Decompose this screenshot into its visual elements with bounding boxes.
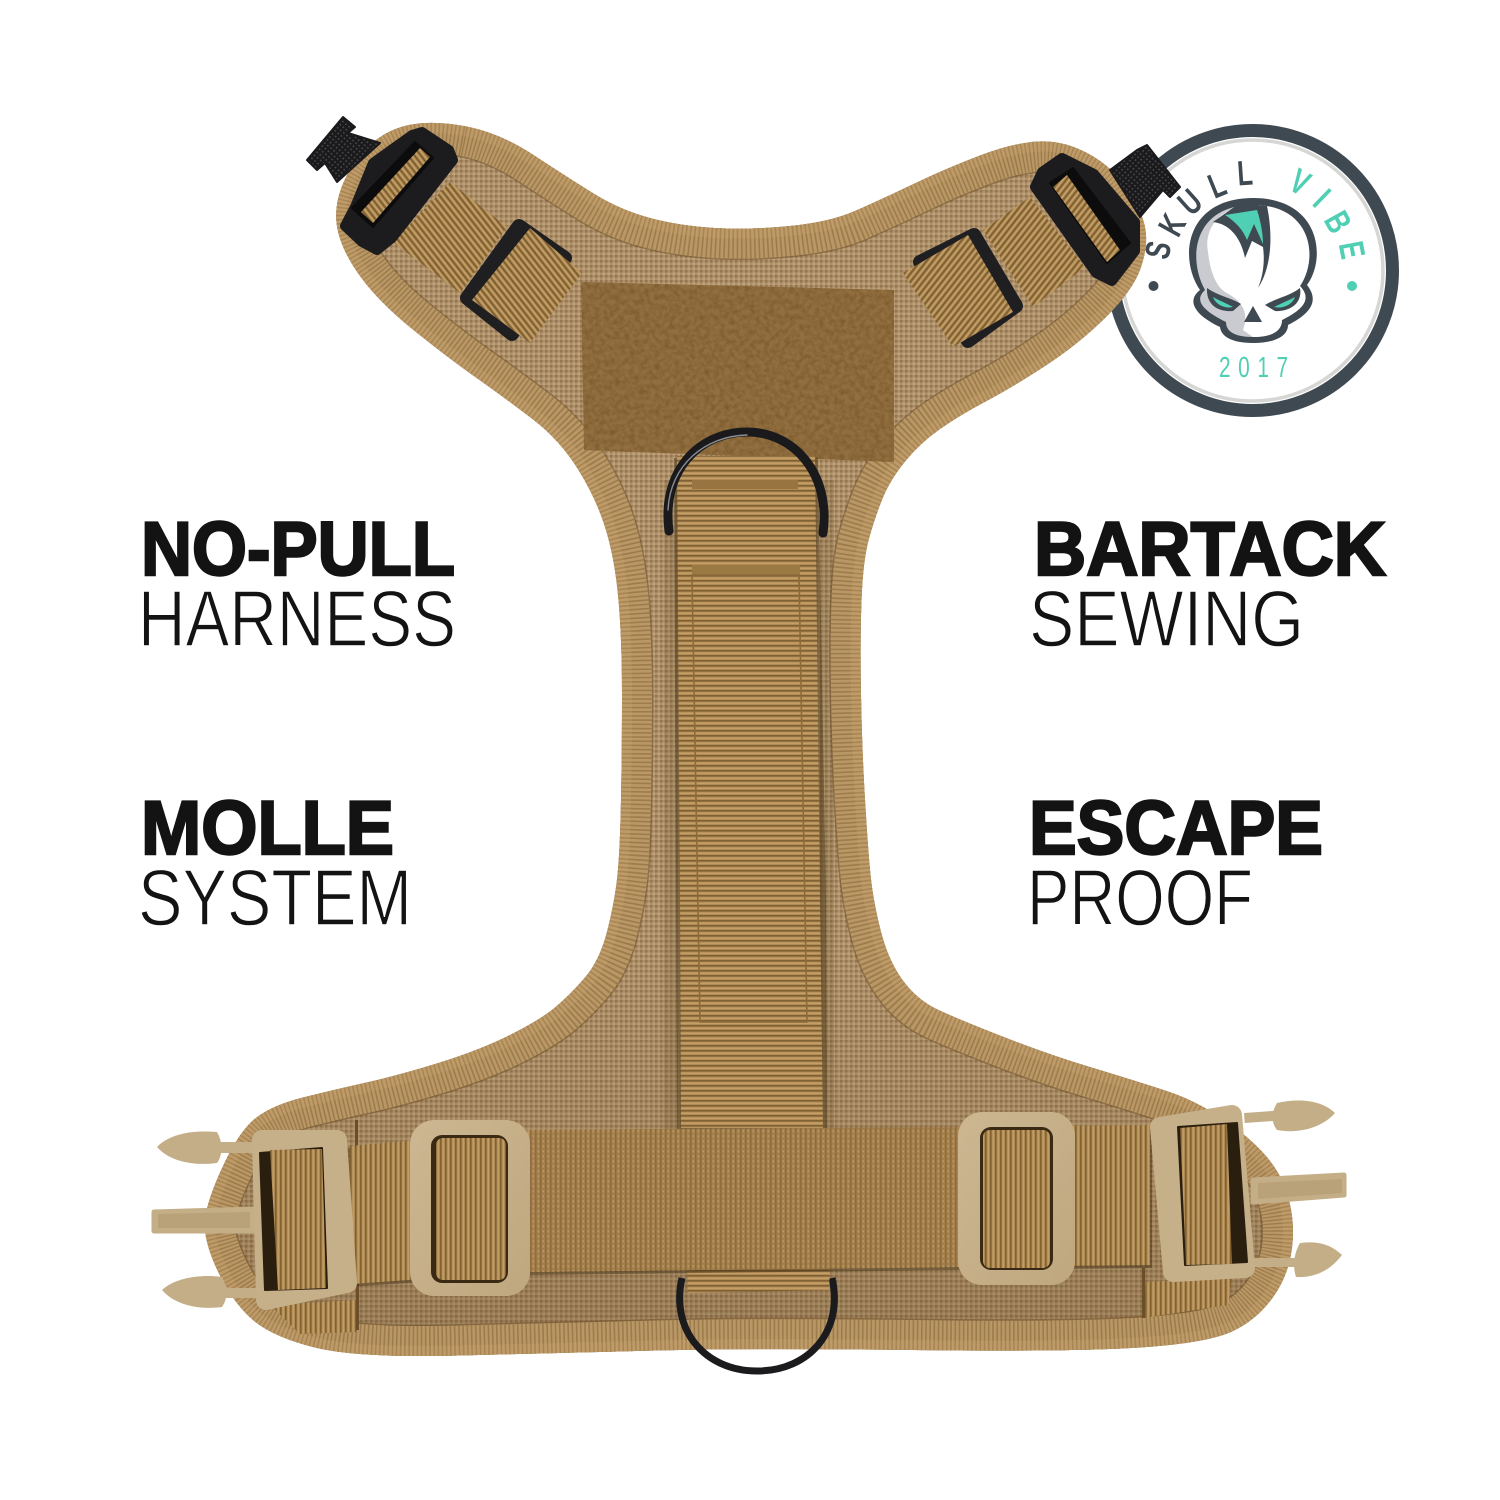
top-left webbing [393, 182, 507, 293]
center right prong [1253, 1175, 1344, 1202]
logo text: SKULL: U [1171, 182, 1210, 223]
logo dot right [1347, 281, 1357, 291]
top-right slider [903, 235, 1016, 347]
feature label: MOLLE SYSTEM: MOLLE [141, 786, 394, 871]
logo text: VIBE [1283, 161, 1372, 262]
velcro patch [581, 282, 894, 462]
harness [154, 117, 1344, 1371]
bottom D-ring tab and ring [680, 1266, 834, 1371]
bar tack stitching lower [692, 565, 800, 575]
horizontal belly strap [346, 1125, 1152, 1287]
feature label: MOLLE SYSTEM [138, 786, 412, 942]
lower right prong [1253, 1242, 1342, 1277]
logo text: SKULL: L [1236, 154, 1254, 194]
feature label: BARTACK SEWING: SEWING [1029, 574, 1304, 663]
top-left slider [467, 226, 582, 343]
mesh shading [200, 480, 1300, 1360]
logo dot left [1148, 281, 1158, 291]
center left prong [154, 1209, 255, 1231]
logo badge: Skull Vibe 2017 [1112, 130, 1392, 410]
panel: harness padded mesh body [205, 123, 1293, 1356]
feature label: BARTACK SEWING: BARTACK [1034, 507, 1386, 592]
logo text: SKULL: K [1151, 208, 1194, 243]
top-right webbing [983, 197, 1085, 307]
logo text: VIBE: V [1283, 161, 1317, 204]
logo text: VIBE: E [1331, 238, 1372, 262]
feature label: ESCAPE PROOF: ESCAPE [1029, 786, 1323, 871]
stitched box on strap [692, 575, 807, 1022]
bar tack stitching top [692, 480, 798, 489]
upper right prong [1244, 1100, 1335, 1131]
logo text: VIBE: B [1316, 205, 1359, 240]
top-left buckle and T-tab [307, 117, 453, 250]
feature label: NO-PULL HARNESS: HARNESS [138, 574, 456, 663]
logo text: SKULL [1138, 154, 1254, 262]
logo text: VIBE: I [1306, 182, 1338, 215]
top-right buckle and T-tab [1035, 145, 1180, 281]
upper left prong [157, 1131, 255, 1164]
feature label: MOLLE SYSTEM: SYSTEM [138, 853, 412, 942]
right inner tan slider [958, 1112, 1075, 1285]
logo text: SKULL: S [1138, 238, 1179, 262]
binding trim around harness edge [205, 123, 1293, 1356]
logo text: SKULL: L [1203, 165, 1232, 206]
logo year: 2017 [1219, 352, 1288, 384]
feature label: ESCAPE PROOF [1027, 786, 1323, 942]
end panels under buckles [270, 1120, 1232, 1334]
feature label: NO-PULL HARNESS [138, 507, 456, 663]
wider center belly panel [530, 1127, 960, 1272]
feature label: NO-PULL HARNESS: NO-PULL [141, 507, 455, 592]
left inner tan slider [410, 1120, 530, 1296]
center vertical strap [674, 456, 827, 1130]
lower left prong [162, 1276, 265, 1308]
icon: skull [1189, 198, 1317, 343]
feature label: ESCAPE PROOF: PROOF [1027, 853, 1253, 942]
chest D-ring [668, 432, 824, 533]
feature label: BARTACK SEWING [1029, 507, 1386, 663]
right side-release buckle with prongs [1160, 1100, 1344, 1277]
left side-release buckle with prongs [154, 1131, 347, 1308]
